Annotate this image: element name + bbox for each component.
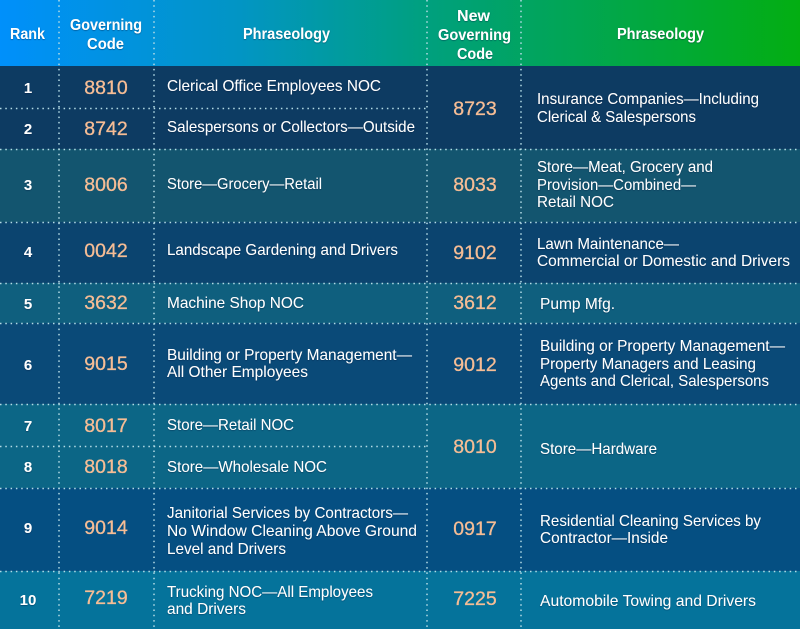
phraseology: governing code: Landscape Gardening and Drivers <box>167 242 398 259</box>
phraseology: new governing code: Pump Mfg. <box>540 296 615 313</box>
phraseology: governing code: and Drivers <box>167 601 246 618</box>
header: New Governing Code: Governing <box>438 27 511 44</box>
rank numbers: 3 <box>24 177 32 194</box>
phraseology: new governing code: Agents and Clerical, Salespersons <box>540 373 769 390</box>
phraseology: new governing code: Property Managers and Leasing <box>540 356 756 373</box>
rank numbers: 1 <box>24 80 32 97</box>
phraseology: new governing code: Automobile Towing and Drivers <box>540 593 756 610</box>
phraseology: new governing code: Residential Cleaning Services by <box>540 513 761 530</box>
governing codes: 8742 <box>84 118 128 140</box>
phraseology: new governing code: Provision—Combined— <box>537 177 696 194</box>
new governing codes: 8033 <box>453 174 497 196</box>
header: Governing Code <box>70 17 142 53</box>
governing codes: 8006 <box>84 174 128 196</box>
phraseology: governing code: All Other Employees <box>167 364 308 381</box>
rank numbers: 8 <box>24 459 32 476</box>
governing codes: 9015 <box>84 353 128 375</box>
governing codes: 8017 <box>84 415 128 437</box>
phraseology: new governing code: Store—Hardware <box>540 441 657 458</box>
phraseology: governing code <box>167 78 417 618</box>
phraseology: governing code: Machine Shop NOC <box>167 295 304 312</box>
phraseology: new governing code: Lawn Maintenance— <box>537 236 679 253</box>
rank numbers: 10 <box>20 592 36 609</box>
rank numbers <box>20 80 36 609</box>
new governing codes: 0917 <box>453 518 497 540</box>
phraseology: governing code: Store—Grocery—Retail <box>167 176 322 193</box>
new governing codes: 8723 <box>453 98 497 120</box>
phraseology: new governing code <box>537 91 790 610</box>
phraseology: new governing code: Contractor—Inside <box>540 530 668 547</box>
header: Governing Code: Governing <box>70 17 142 34</box>
governing codes: 7219 <box>84 587 128 609</box>
header: Phraseology (new): Phraseology <box>617 26 704 43</box>
phraseology: new governing code: Retail NOC <box>537 194 614 211</box>
phraseology: governing code: Store—Wholesale NOC <box>167 459 327 476</box>
phraseology: governing code: Salespersons or Collectors—Outside <box>167 119 415 136</box>
header: Governing Code: Code <box>87 36 124 53</box>
header: New Governing Code: Code <box>457 46 493 63</box>
phraseology: new governing code: Clerical & Salespersons <box>537 109 696 126</box>
phraseology: new governing code: Building or Property Management— <box>540 338 785 355</box>
phraseology: governing code: Trucking NOC—All Employees <box>167 584 373 601</box>
rank numbers: 6 <box>24 357 32 374</box>
phraseology: governing code: Clerical Office Employees NOC <box>167 78 381 95</box>
governing codes: 0042 <box>84 240 128 262</box>
new governing codes: 9012 <box>453 354 497 376</box>
phraseology: governing code: Janitorial Services by Contractors— <box>167 505 408 522</box>
phraseology: new governing code: Commercial or Domestic and Drivers <box>537 253 790 270</box>
governing codes: 9014 <box>84 517 128 539</box>
governing codes <box>84 77 128 609</box>
header: Phraseology: Phraseology <box>243 26 330 43</box>
phraseology: new governing code: Store—Meat, Grocery and <box>537 159 713 176</box>
rank numbers: 2 <box>24 121 32 138</box>
phraseology: governing code: No Window Cleaning Above Ground <box>167 523 417 540</box>
new governing codes <box>453 98 497 610</box>
rank numbers: 4 <box>24 244 33 261</box>
new governing codes: 7225 <box>453 588 497 610</box>
phraseology: new governing code: Insurance Companies—Including <box>537 91 759 108</box>
governing codes: 3632 <box>84 292 128 314</box>
new governing codes: 3612 <box>453 292 497 314</box>
header bar <box>0 0 800 66</box>
header: New Governing Code: New <box>457 8 491 25</box>
header: Rank: Rank <box>10 26 45 43</box>
new governing codes: 9102 <box>453 242 497 264</box>
rank numbers: 5 <box>24 296 32 313</box>
phraseology: governing code: Building or Property Management— <box>167 347 412 364</box>
rank numbers: 7 <box>24 418 32 435</box>
new governing codes: 8010 <box>453 436 497 458</box>
header labels <box>10 8 704 63</box>
governing codes: 8810 <box>84 77 128 99</box>
rank numbers: 9 <box>24 520 32 537</box>
governing codes: 8018 <box>84 456 128 478</box>
phraseology: governing code: Level and Drivers <box>167 541 286 558</box>
phraseology: governing code: Store—Retail NOC <box>167 417 294 434</box>
header: New Governing Code <box>438 8 511 63</box>
